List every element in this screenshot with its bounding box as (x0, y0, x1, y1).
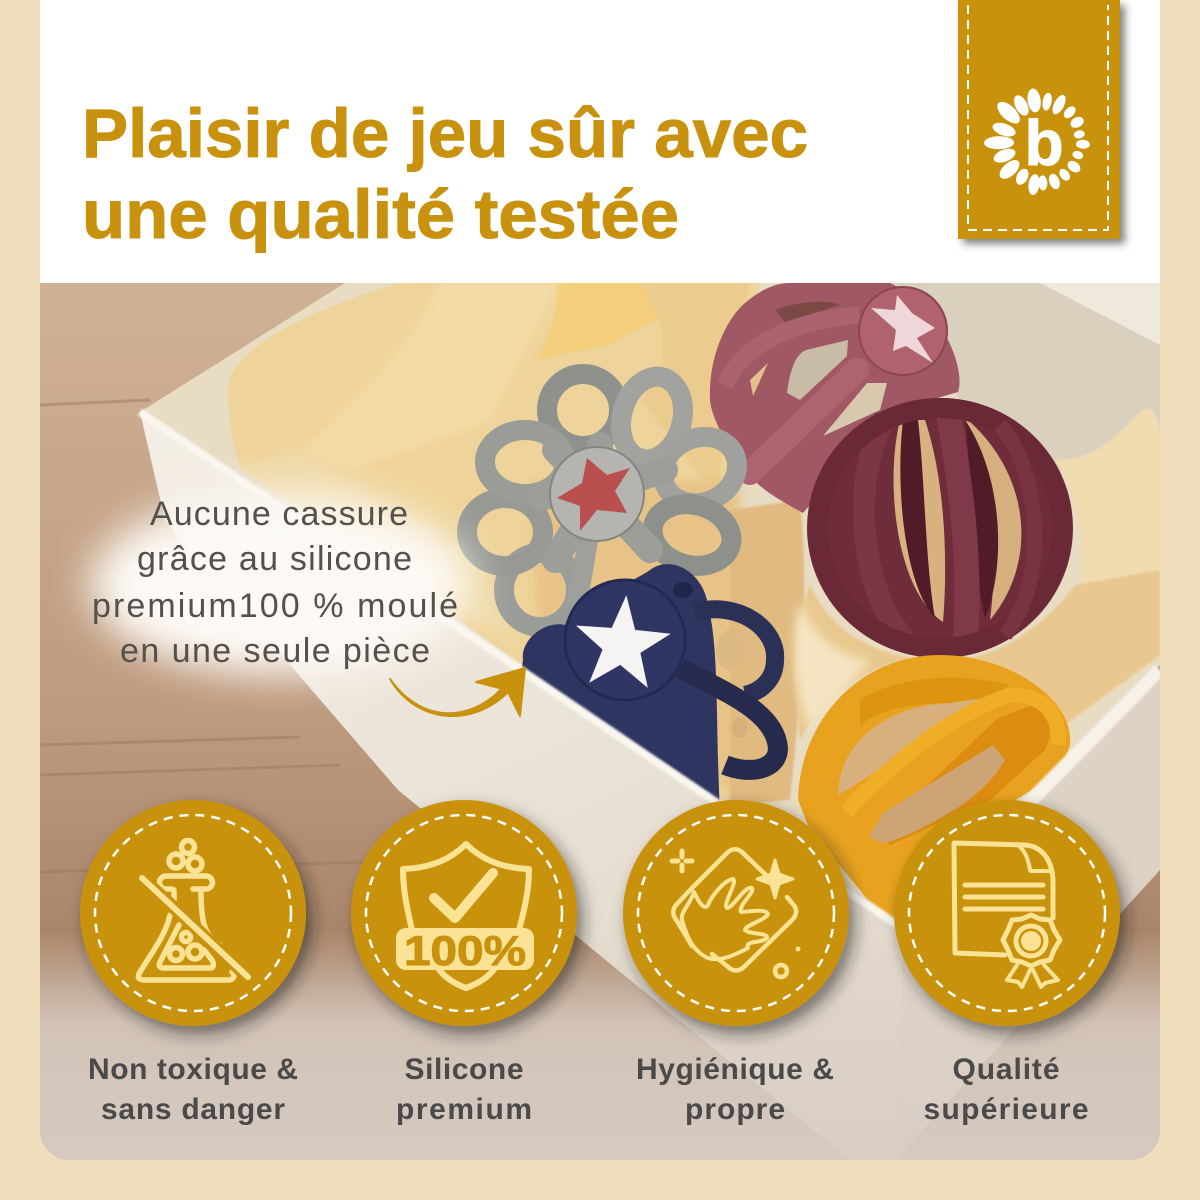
icon: hand and cloth (672, 849, 800, 977)
toy: dark maroon ball (807, 398, 1073, 658)
label: sans danger (101, 1093, 285, 1126)
label: premium (396, 1093, 532, 1126)
box interior (140, 283, 1160, 925)
toy: navy ball (520, 564, 778, 810)
box right rim (1020, 665, 1160, 804)
fabric box front wall (140, 412, 905, 1160)
label (924, 1053, 1088, 1126)
arrow (390, 668, 525, 716)
brand tag with logo (958, 0, 1120, 239)
callout: silicone text with glow and arrow: Aucune cassure (150, 495, 408, 533)
white header panel (40, 0, 1160, 283)
toy: mauve ball (710, 283, 960, 513)
label: supérieure (924, 1093, 1088, 1126)
icon: certificate (954, 843, 1060, 987)
label (636, 1053, 834, 1126)
label: propre (685, 1093, 785, 1126)
icon: crossed flask (138, 840, 248, 980)
callout: silicone text with glow and arrow: en une seule pièce (120, 632, 430, 670)
badge: non toxique (80, 800, 306, 1126)
label: Non toxique & (88, 1053, 298, 1086)
callout: silicone text with glow and arrow: grâce au silicone (137, 540, 412, 578)
fabric box right wall (895, 680, 1160, 1160)
label (88, 1053, 298, 1126)
badge: silicone premium (351, 800, 577, 1126)
icon: sunflower logo: b (1024, 107, 1064, 179)
title: Plaisir de jeu sûr avec (82, 95, 808, 172)
toy: yellow ring (798, 655, 1070, 922)
bottom fade overlay (40, 930, 1160, 1160)
title: une qualité testée (82, 176, 679, 253)
badge: superior quality (894, 800, 1120, 1126)
label (396, 1053, 532, 1126)
product photo (40, 283, 1161, 1160)
label: Qualité (952, 1053, 1060, 1086)
icon: shield 100% (396, 844, 534, 988)
badge: hygienic (623, 800, 849, 1126)
wood floor (40, 283, 1160, 1160)
callout: silicone text with glow and arrow: premium100 % moulé (92, 587, 458, 625)
box front rim (140, 412, 905, 930)
label: Silicone (404, 1053, 524, 1086)
yellow muslin cloth (228, 283, 1161, 805)
icon: sunflower logo (984, 88, 1090, 196)
callout: silicone text with glow and arrow (90, 495, 525, 716)
toy: grey flower (467, 370, 748, 627)
label: Hygiénique & (636, 1053, 834, 1086)
icon: shield 100%: 100% (404, 927, 526, 974)
title (82, 95, 808, 253)
